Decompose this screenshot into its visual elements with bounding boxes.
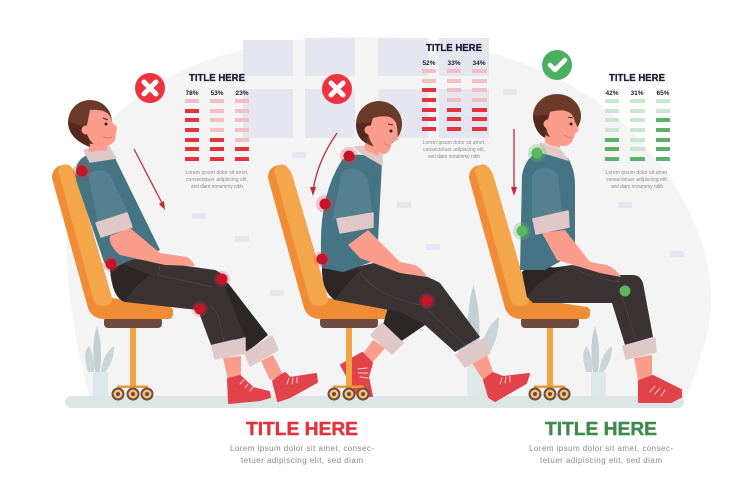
chart 2: 33% <box>447 60 461 67</box>
chart 3: 65% <box>656 90 670 97</box>
caption green <box>529 419 673 465</box>
caption green: tetuer adipiscing elit, sed diam <box>540 456 662 465</box>
legs <box>322 262 529 401</box>
wall bricks <box>192 89 684 296</box>
plant middle <box>456 285 499 396</box>
arm <box>348 230 427 277</box>
chart 3 <box>605 73 670 190</box>
chart 1: 78% <box>185 90 199 97</box>
arm <box>542 230 621 277</box>
chart 2: 34% <box>472 60 486 67</box>
floor <box>65 396 684 408</box>
caption red: tetuer adipiscing elit, sed diam <box>241 456 363 465</box>
chart 2 <box>422 43 487 160</box>
caption red: TITLE HERE <box>246 419 358 439</box>
chair 2 <box>268 164 389 400</box>
chart 3: consectetuer adipiscing elit, <box>606 177 668 183</box>
chart 2: Lorem ipsum dolor sit amet, <box>422 140 486 146</box>
caption green: TITLE HERE <box>545 419 657 439</box>
icon: check <box>542 50 572 80</box>
chart 3: Lorem ipsum dolor sit amet, <box>606 170 668 176</box>
figure 1: reclined posture <box>52 100 317 403</box>
chart 1: sed diam nonummy nibh <box>191 184 243 190</box>
caption red: Lorem ipsum dolor sit amet, consec- <box>230 444 374 453</box>
head <box>356 101 402 156</box>
healthy points green <box>513 144 630 296</box>
legs <box>110 258 317 403</box>
arm <box>110 228 195 266</box>
collar <box>355 146 382 165</box>
chart 1 <box>185 73 249 190</box>
back leg <box>341 340 385 396</box>
chart 1: TITLE HERE <box>189 73 245 84</box>
pain points red <box>73 147 435 317</box>
chart 3: TITLE HERE <box>609 73 665 84</box>
chart 2: 52% <box>422 60 436 67</box>
collar <box>540 143 568 160</box>
chart 3: 31% <box>630 90 644 97</box>
chart 3: 42% <box>605 90 619 97</box>
chart 3: sed diam nonummy nibh <box>611 184 663 190</box>
chair 3 <box>469 164 590 400</box>
chart 2: consectetuer adipiscing elit, <box>423 147 485 153</box>
icon: cross 1 <box>135 73 165 103</box>
arrow 3 <box>511 129 517 196</box>
chart 1: 53% <box>210 90 224 97</box>
legs <box>522 265 681 402</box>
torso <box>520 153 575 270</box>
head <box>533 94 581 148</box>
figure 3: correct posture <box>469 94 681 402</box>
chair 1 <box>52 164 173 400</box>
plant right <box>583 326 612 396</box>
icon: cross 2 <box>322 74 352 104</box>
arrow 2 <box>310 133 337 196</box>
chart 1: Lorem ipsum dolor sit amet, <box>186 170 248 176</box>
caption red <box>230 419 374 465</box>
collar <box>84 146 116 162</box>
chart 2: TITLE HERE <box>426 43 482 54</box>
background blob <box>67 37 711 400</box>
chart 2: sed diam nonummy nibh <box>428 154 480 160</box>
chart 1: consectetuer adipiscing elit, <box>186 177 248 183</box>
figure 2: slouched posture <box>268 101 529 401</box>
caption green: Lorem ipsum dolor sit amet, consec- <box>529 444 673 453</box>
head <box>68 100 117 152</box>
plant left <box>85 326 114 396</box>
arrow 1 <box>134 149 165 210</box>
chart 1: 23% <box>235 90 249 97</box>
torso <box>321 155 382 272</box>
torso <box>76 152 160 270</box>
window panes <box>243 38 489 138</box>
